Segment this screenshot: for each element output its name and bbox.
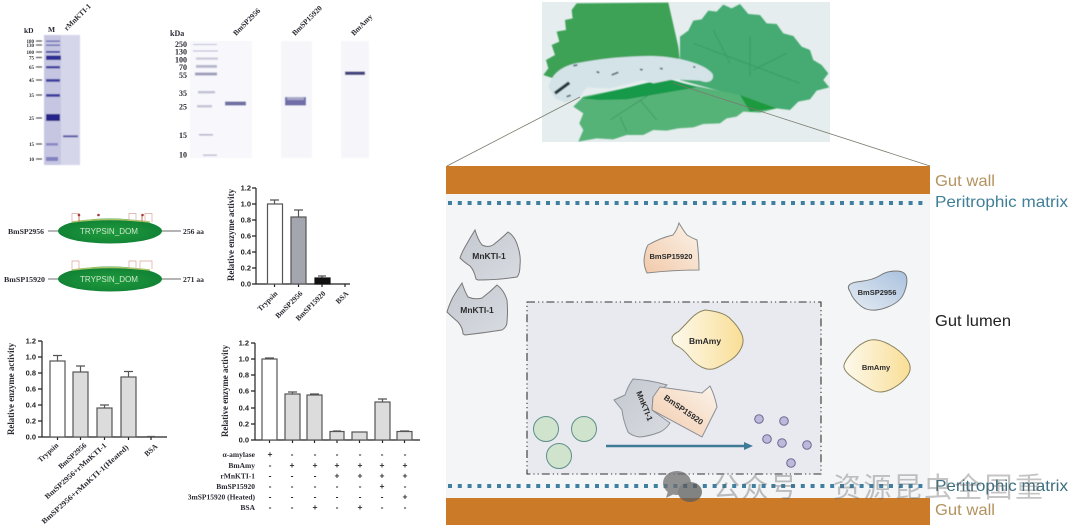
label: peritrophic matrix top: Peritrophic matrix bbox=[935, 194, 1068, 211]
gel 1 labels: 45 bbox=[29, 79, 34, 84]
sign table: + bbox=[403, 460, 408, 470]
bar chart: rMnKTI-1 inhibition of BmSP2956: BSA bbox=[142, 441, 160, 458]
bar chart: rMnKTI-1 inhibition of BmSP2956: Relative enzyme activity bbox=[6, 343, 16, 435]
icon: chat bubbles bbox=[663, 471, 702, 502]
BmSP2956 domain: BmSP2956 bbox=[8, 228, 45, 236]
bar chart: BmSP trypsin activity: BSA bbox=[334, 289, 351, 306]
gel 1 labels: 130 bbox=[26, 44, 34, 49]
BmSP2956 protein bbox=[848, 271, 907, 310]
gel 2 labels: 35 bbox=[179, 89, 187, 98]
gel 2 labels: kDa bbox=[170, 29, 184, 38]
sign table: + bbox=[290, 460, 295, 470]
MnKTI-1 and BmSP15920 complex: BmSP15920 bbox=[662, 393, 705, 427]
sign table: - bbox=[359, 492, 362, 502]
gel 1 labels: rMnKTI-1 bbox=[62, 1, 93, 32]
MnKTI-1 protein top: MnKTI-1 bbox=[472, 251, 506, 261]
illustration: silkworm on mulberry leaves bbox=[542, 2, 830, 142]
bar chart: rMnKTI-1 inhibition of BmSP2956 bbox=[6, 336, 167, 526]
bar chart: rMnKTI-1 inhibition of BmSP2956: 0.4 bbox=[26, 400, 37, 410]
sign table: - bbox=[336, 449, 339, 459]
gel 1 labels: kD bbox=[24, 26, 34, 35]
gel 2 labels: 100 bbox=[175, 56, 187, 64]
sign table: - bbox=[269, 492, 272, 502]
MnKTI-1 protein bottom: MnKTI-1 bbox=[460, 305, 494, 315]
bar chart: rMnKTI-1 inhibition of BmSP2956: 0.2 bbox=[26, 416, 36, 426]
gel 2 labels: BmSP15920 bbox=[290, 3, 324, 37]
bar chart: alpha-amylase activity with sign table: 1.0 bbox=[239, 354, 249, 364]
sign table: - bbox=[291, 492, 294, 502]
watermark bbox=[663, 471, 1043, 503]
gel lanes and bands bbox=[190, 41, 369, 158]
bottom gut wall bbox=[446, 498, 930, 525]
sign table bbox=[188, 449, 408, 512]
sign table: - bbox=[269, 481, 272, 491]
peritrophic matrix top bbox=[448, 201, 928, 205]
bar chart: BmSP trypsin activity: 1.0 bbox=[241, 200, 251, 208]
gel 2 labels: BmAmy bbox=[349, 12, 374, 37]
sign table: BmAmy bbox=[228, 461, 255, 470]
gel 1 labels: 10 bbox=[29, 158, 34, 163]
sign table: + bbox=[313, 460, 318, 470]
zoom connector lines bbox=[447, 83, 930, 166]
gel 2 labels: 130 bbox=[175, 48, 187, 56]
sign table: + bbox=[335, 470, 340, 480]
sign table: + bbox=[268, 449, 273, 459]
gel 2 labels: BmSP2956 bbox=[231, 6, 262, 37]
BmSP15920 protein: BmSP15920 bbox=[650, 252, 692, 261]
sign table: + bbox=[403, 492, 408, 502]
sign table: - bbox=[404, 481, 407, 491]
sign table: - bbox=[291, 449, 294, 459]
bar chart: alpha-amylase activity with sign table bbox=[188, 338, 420, 512]
bar chart: alpha-amylase activity with sign table: 1.2 bbox=[239, 338, 249, 348]
sign table: - bbox=[404, 502, 407, 512]
sign table: + bbox=[313, 502, 318, 512]
sign table: - bbox=[291, 481, 294, 491]
gel background bbox=[36, 35, 80, 165]
gel 2 labels: 70 bbox=[179, 63, 187, 72]
watermark: 公众号 bbox=[713, 473, 797, 503]
sign table: BmSP15920 bbox=[216, 482, 255, 491]
inset box: inhibition mechanism bbox=[527, 302, 821, 474]
sign table: + bbox=[380, 460, 385, 470]
bar chart: alpha-amylase activity with sign table: 0.2 bbox=[239, 420, 249, 428]
sign table: + bbox=[335, 460, 340, 470]
watermark: 资源昆虫全国重 bbox=[833, 472, 1043, 503]
BmSP2956 domain: TRYPSIN_DOM bbox=[80, 227, 138, 236]
gel 1 labels bbox=[24, 1, 93, 163]
bar chart: BmSP trypsin activity: 0.8 bbox=[241, 216, 251, 224]
sign table: - bbox=[314, 470, 317, 480]
top gut wall bbox=[446, 166, 930, 194]
BmAmy protein in inset: BmAmy bbox=[689, 336, 721, 346]
sign table: + bbox=[380, 481, 385, 491]
arrow: digestion bbox=[606, 442, 753, 450]
BmSP15920 domain: TRYPSIN_DOM bbox=[80, 275, 138, 284]
bar chart: BmSP trypsin activity bbox=[226, 184, 351, 323]
gel 2 labels: 55 bbox=[179, 71, 187, 80]
bar chart: rMnKTI-1 inhibition of BmSP2956: BmSP2956+rMnKTI-1 bbox=[43, 441, 109, 501]
product dots bbox=[755, 415, 811, 467]
gel 2 labels: 25 bbox=[179, 102, 187, 112]
bar chart: BmSP trypsin activity: 0.2 bbox=[241, 264, 251, 272]
peritrophic matrix bottom bbox=[448, 484, 928, 488]
sign table: - bbox=[269, 502, 272, 512]
sign table: - bbox=[291, 470, 294, 480]
gel 2 labels bbox=[170, 3, 374, 160]
BmSP15920 domain bbox=[4, 261, 205, 292]
label: gut wall top: Gut wall bbox=[935, 173, 995, 190]
MnKTI-1 protein bottom bbox=[447, 283, 508, 335]
sign table: - bbox=[269, 460, 272, 470]
panel: purified proteins SDS-PAGE gel bbox=[170, 3, 374, 160]
bar chart: rMnKTI-1 inhibition of BmSP2956: BmSP2956+rMnKTI-1(Heated) bbox=[40, 442, 131, 526]
substrate circles bbox=[534, 416, 596, 468]
bar chart: rMnKTI-1 inhibition of BmSP2956: Trypsin bbox=[36, 440, 61, 464]
sign table: + bbox=[380, 470, 385, 480]
bar chart: BmSP trypsin activity: BmSP2956 bbox=[273, 289, 305, 320]
gel 1 labels: 75 bbox=[29, 56, 34, 62]
BmSP2956 domain bbox=[8, 214, 205, 244]
bar chart: alpha-amylase activity with sign table: 0.4 bbox=[239, 404, 250, 412]
BmSP2956 domain: 256 aa bbox=[183, 228, 205, 236]
gel 1 labels: 25 bbox=[29, 117, 34, 122]
sign table: BSA bbox=[240, 503, 256, 512]
sign table: + bbox=[358, 470, 363, 480]
sign table: - bbox=[314, 492, 317, 502]
bar chart: rMnKTI-1 inhibition of BmSP2956: BmSP2956 bbox=[56, 441, 89, 471]
gel 2 labels: 10 bbox=[179, 150, 187, 160]
bar chart: BmSP trypsin activity: 0.6 bbox=[241, 232, 251, 240]
bar chart: alpha-amylase activity with sign table: 0.0 bbox=[239, 436, 249, 444]
BmAmy protein right: BmAmy bbox=[862, 363, 891, 372]
sign table: + bbox=[403, 470, 408, 480]
BmSP15920 protein bbox=[644, 223, 699, 273]
panel: domain diagrams bbox=[4, 214, 205, 292]
sign table: - bbox=[381, 449, 384, 459]
bar chart: rMnKTI-1 inhibition of BmSP2956: 1.2 bbox=[26, 336, 36, 346]
gel 1 labels: 35 bbox=[29, 94, 34, 99]
bar chart: rMnKTI-1 inhibition of BmSP2956: 0.8 bbox=[26, 368, 36, 378]
bar chart: rMnKTI-1 inhibition of BmSP2956: 1.0 bbox=[26, 352, 36, 362]
bar chart: BmSP trypsin activity: 0.0 bbox=[241, 280, 251, 288]
bar chart: BmSP trypsin activity: Relative enzyme activity bbox=[226, 189, 236, 281]
bar chart: alpha-amylase activity with sign table: 0.6 bbox=[239, 386, 249, 396]
bar chart: alpha-amylase activity with sign table: Relative enzyme activity bbox=[220, 345, 230, 437]
MnKTI-1 and BmSP15920 complex: MnKTI-1 bbox=[634, 390, 655, 423]
gel 1 labels: 65 bbox=[29, 66, 34, 71]
sign table: + bbox=[358, 502, 363, 512]
bar chart: rMnKTI-1 inhibition of BmSP2956: 0.6 bbox=[26, 384, 36, 394]
sign table: - bbox=[336, 502, 339, 512]
BmAmy protein in inset bbox=[672, 310, 743, 369]
sign table: - bbox=[359, 449, 362, 459]
bar chart: rMnKTI-1 inhibition of BmSP2956: 0.0 bbox=[26, 432, 36, 442]
label: peritrophic matrix bottom: Peritrophic matrix bbox=[935, 478, 1068, 495]
gel 2 labels: 15 bbox=[179, 131, 187, 140]
gut lumen background bbox=[446, 194, 930, 498]
bar chart: BmSP trypsin activity: Trypsin bbox=[255, 288, 280, 313]
gel 1 labels: 100 bbox=[26, 51, 34, 56]
BmSP15920 domain: 271 aa bbox=[183, 276, 205, 284]
MnKTI-1 and BmSP15920 complex bbox=[614, 379, 717, 437]
gel 1 labels: 15 bbox=[29, 143, 34, 148]
sign table: - bbox=[404, 449, 407, 459]
bar chart: BmSP trypsin activity: 0.4 bbox=[241, 248, 252, 256]
panel: rMnKTI-1 SDS-PAGE gel bbox=[24, 1, 93, 165]
bar chart: BmSP trypsin activity: 1.2 bbox=[241, 184, 251, 192]
BmSP15920 domain: BmSP15920 bbox=[4, 276, 46, 284]
MnKTI-1 protein top bbox=[460, 230, 520, 280]
label: gut wall bottom: Gut wall bbox=[935, 502, 995, 519]
sign table: + bbox=[358, 460, 363, 470]
sign table: - bbox=[314, 449, 317, 459]
sign table: - bbox=[381, 502, 384, 512]
sign table: - bbox=[314, 481, 317, 491]
sign table: rMnKTI-1 bbox=[220, 472, 255, 480]
sign table: 3mSP15920 (Heated) bbox=[188, 492, 256, 502]
sign table: α-amylase bbox=[222, 450, 256, 459]
label: gut lumen: Gut lumen bbox=[935, 313, 1011, 330]
BmSP2956 protein: BmSP2956 bbox=[858, 288, 896, 297]
panel: gut diagram bbox=[446, 166, 930, 525]
gel 1 labels: M bbox=[48, 25, 55, 34]
bar chart: alpha-amylase activity with sign table: 0.8 bbox=[239, 370, 249, 380]
gel 2 labels: 250 bbox=[175, 40, 187, 49]
BmAmy protein right bbox=[844, 340, 910, 392]
sign table: - bbox=[359, 481, 362, 491]
sign table: - bbox=[381, 492, 384, 502]
sign table: - bbox=[269, 470, 272, 480]
sign table: - bbox=[336, 492, 339, 502]
sign table: - bbox=[291, 502, 294, 512]
sign table: - bbox=[336, 481, 339, 491]
bar chart: BmSP trypsin activity: BmSP15920 bbox=[294, 289, 328, 323]
gel 1 labels: 180 bbox=[26, 40, 34, 45]
